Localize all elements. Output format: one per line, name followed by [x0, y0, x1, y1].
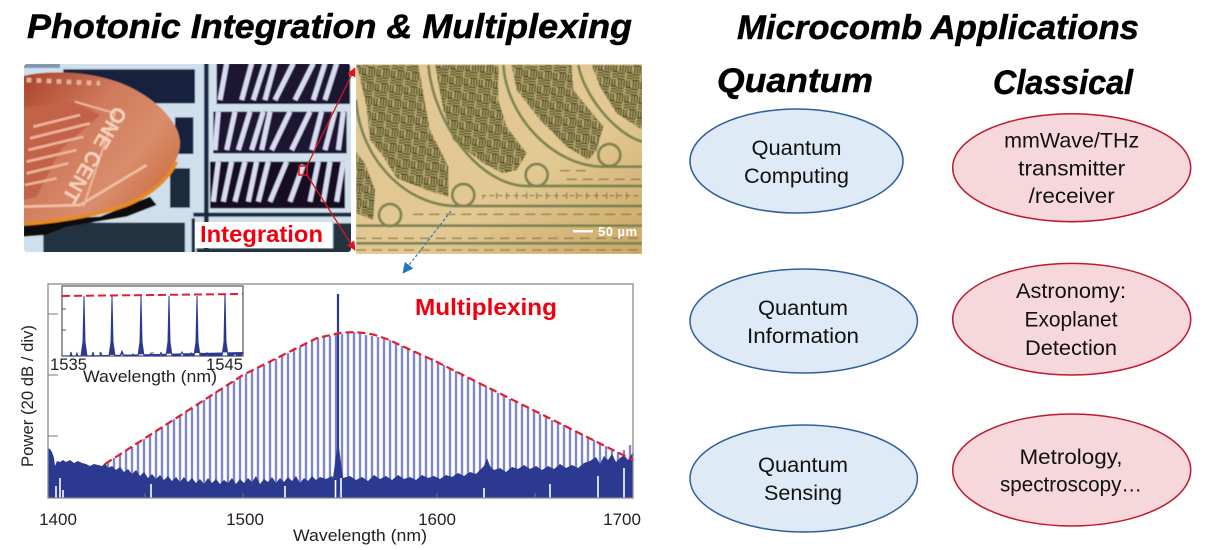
oval: quantum computing: Quantum [752, 137, 842, 160]
label: multiplexing: Multiplexing [415, 294, 557, 320]
x tick labels [39, 510, 641, 529]
chip rows [210, 63, 350, 208]
heading: quantum: Quantum [717, 62, 873, 100]
label: integration: Integration [200, 221, 323, 247]
inset tick 1545: 1545 [206, 355, 243, 374]
noise floor [48, 440, 633, 498]
inset x label: Wavelength (nm) [83, 367, 217, 386]
oval: quantum sensing: Quantum [758, 454, 848, 477]
x axis label: Wavelength (nm) [293, 526, 427, 545]
photo: micrograph of ring resonators [356, 64, 642, 254]
oval: quantum information [690, 269, 917, 373]
oval: quantum sensing: Sensing [764, 482, 842, 505]
x tick labels: 1600 [418, 510, 456, 529]
central pump line [337, 294, 339, 498]
photo: penny beside microresonator chips [23, 63, 353, 253]
envelope [105, 332, 633, 464]
oval: quantum sensing [690, 425, 917, 532]
oval: mmWave/THz: mmWave/THz [1004, 130, 1139, 153]
inset spectrum [62, 286, 243, 356]
oval: quantum computing [690, 109, 903, 213]
oval: metrology: Metrology, [1020, 446, 1122, 469]
y axis label: Power (20 dB / div) [18, 325, 37, 467]
oval: astronomy [953, 263, 1191, 375]
oval: astronomy: Detection [1025, 337, 1117, 360]
comb lines [108, 332, 630, 498]
penny [23, 72, 180, 237]
oval: astronomy: Astronomy: [1016, 280, 1126, 303]
oval: mmWave/THz: /receiver [1029, 185, 1115, 208]
noise gaps [56, 468, 624, 498]
herringbone patches [356, 65, 642, 220]
x tick labels: 1700 [603, 510, 641, 529]
scale label: 50 µm [598, 224, 637, 239]
frame [48, 284, 633, 498]
oval: astronomy: Exoplanet [1024, 309, 1118, 332]
label box: integration [195, 222, 332, 248]
heading: classical: Classical [993, 64, 1134, 102]
penny: ONE CENT [57, 102, 131, 207]
oval: mmWave/THz: transmitter [1018, 158, 1125, 181]
oval: quantum information: Quantum [758, 297, 848, 320]
chart: comb spectrum [18, 284, 641, 545]
title: microcomb applications: Microcomb Applications [737, 9, 1139, 47]
scale bar [573, 230, 593, 232]
zoom marker and arrows [299, 68, 355, 250]
x tick labels: 1500 [226, 510, 264, 529]
waveguides [356, 65, 642, 243]
arrow: micrograph to spectrum [403, 211, 451, 273]
x tick labels: 1400 [39, 510, 77, 529]
oval: metrology: spectroscopy… [1000, 474, 1142, 497]
oval: quantum computing: Computing [744, 165, 849, 188]
oval: mmWave/THz [953, 114, 1191, 222]
title: photonic integration: Photonic Integration & Multiplexing [27, 8, 632, 46]
oval: quantum information: Information [747, 325, 859, 348]
oval: metrology [953, 414, 1191, 526]
inset tick 1535: 1535 [50, 355, 87, 374]
